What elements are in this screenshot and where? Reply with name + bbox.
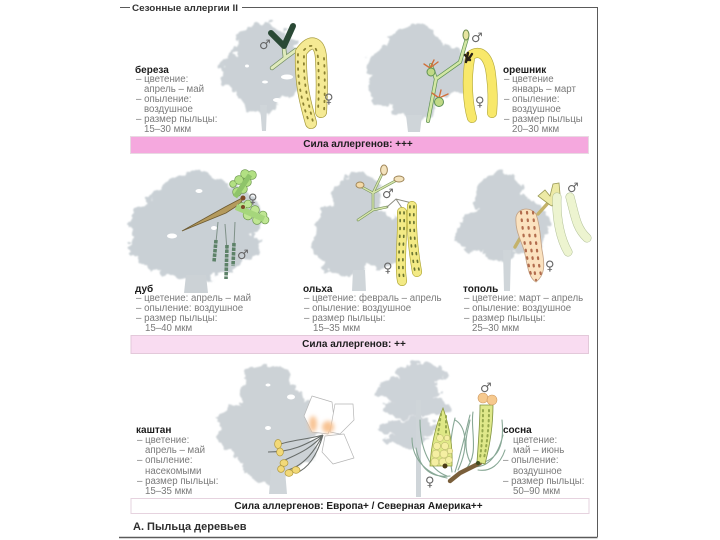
panel: alder — [303, 165, 442, 334]
hazel text — [503, 65, 583, 135]
pine branch, needles and cones — [412, 393, 505, 481]
birch text: – цветение: — [136, 74, 188, 85]
female symbol: ♀ — [475, 95, 485, 110]
poplar text: – опыление: воздушное — [464, 303, 571, 314]
strength bar: Europe / North America: Сила аллергенов: Европа+ / Северная Америка++ — [234, 501, 483, 512]
alder text: ольха — [303, 284, 333, 295]
alder tree silhouette — [313, 173, 406, 276]
female symbol: ♀ — [383, 261, 393, 276]
hazel text: – размер пыльцы — [504, 114, 583, 125]
female symbol: ♀ — [324, 92, 334, 107]
pine text: 50–90 мкм — [513, 486, 560, 497]
chestnut text: апрель – май — [145, 445, 205, 456]
poplar text — [463, 284, 583, 334]
panel: chestnut — [136, 365, 354, 497]
chestnut flower — [268, 396, 354, 476]
strength bar: +++: Сила аллергенов: +++ — [303, 139, 413, 150]
birch tree silhouette — [220, 22, 304, 113]
chestnut text: насекомыми — [145, 466, 201, 477]
alder text: – цветение: февраль – апрель — [304, 293, 442, 304]
oak text: дуб — [135, 283, 153, 295]
pine text: май – июнь — [513, 445, 564, 456]
pine text: воздушное — [513, 466, 562, 477]
strength bar: ++: Сила аллергенов: ++ — [302, 339, 406, 350]
alder text: – размер пыльцы: — [304, 313, 385, 324]
chestnut canopy gaps — [265, 384, 295, 430]
alder text: 15–35 мкм — [313, 323, 360, 334]
alder shoot and catkins — [356, 165, 419, 281]
strength bar: +++ — [130, 136, 588, 154]
oak text: – опыление: воздушное — [136, 303, 243, 314]
female symbol: ♀ — [545, 259, 555, 274]
strength bar: ++ — [131, 336, 588, 354]
panel: hazel — [367, 26, 583, 135]
birch text: – опыление: — [136, 94, 192, 105]
male symbol: ♂ — [259, 38, 271, 53]
birch text: воздушное — [144, 104, 193, 115]
pine text: – размер пыльцы: — [503, 476, 584, 487]
chestnut text: – опыление: — [137, 455, 193, 466]
male symbol: ♂ — [480, 381, 492, 396]
oak text: 15–40 мкм — [145, 323, 192, 334]
page frame — [119, 8, 598, 538]
pine text: сосна — [503, 425, 532, 436]
panel: oak — [130, 169, 269, 334]
hazel text: 20–30 мкм — [512, 124, 559, 135]
male symbol: ♂ — [382, 187, 394, 202]
hazel shoot and catkins — [424, 30, 493, 121]
panel: poplar — [457, 173, 587, 334]
panel: birch — [135, 22, 334, 135]
birch canopy gaps — [245, 64, 293, 102]
hazel text: январь – март — [512, 84, 576, 95]
chestnut text — [136, 425, 218, 497]
pine text: цветение: — [513, 435, 557, 446]
birch text: береза — [135, 64, 169, 76]
pine trunk — [416, 400, 421, 497]
oak text — [135, 283, 251, 334]
poplar text: тополь — [463, 284, 498, 295]
chestnut text: 15–35 мкм — [145, 486, 192, 497]
poplar text: – цветение: март – апрель — [464, 293, 583, 304]
chestnut text: каштан — [136, 425, 171, 436]
birch trunk — [260, 105, 267, 131]
oak text: – цветение: апрель – май — [136, 293, 251, 304]
panel: pine — [378, 363, 584, 497]
hazel text: – цветение — [504, 74, 554, 85]
pine tree silhouette — [378, 363, 452, 446]
poplar text: 25–30 мкм — [472, 323, 519, 334]
birch text: 15–30 мкм — [144, 124, 191, 135]
birch text: – размер пыльцы: — [136, 114, 217, 125]
female symbol: ♀ — [248, 192, 258, 207]
poplar tree silhouette — [457, 173, 548, 262]
poplar shoot and catkins — [515, 183, 587, 282]
title: Сезонные аллергии II — [132, 3, 238, 13]
alder trunk — [352, 270, 366, 291]
chestnut text: – цветение: — [137, 435, 189, 446]
strength bar: Europe / North America — [131, 498, 589, 514]
female symbol: ♀ — [425, 475, 435, 490]
pine text — [503, 425, 584, 497]
birch shoot and catkins — [271, 26, 325, 123]
male symbol: ♂ — [237, 248, 249, 263]
male symbol: ♂ — [567, 181, 579, 196]
hazel tree silhouette — [367, 26, 469, 121]
poplar text: – размер пыльцы: — [464, 313, 545, 324]
oak trunk — [184, 275, 208, 293]
alder text — [303, 284, 442, 334]
chestnut tree silhouette — [218, 365, 321, 483]
oak shoot, leaves and catkins — [182, 169, 269, 279]
poplar trunk — [503, 250, 511, 291]
birch text — [135, 64, 217, 135]
section caption: А. Пыльца деревьев — [133, 521, 247, 533]
oak canopy gaps — [167, 189, 217, 238]
chestnut text: – размер пыльцы: — [137, 476, 218, 487]
hazel text: воздушное — [512, 104, 561, 115]
hazel text: – опыление: — [504, 94, 560, 105]
oak text: – размер пыльцы: — [136, 313, 217, 324]
hazel trunk — [406, 115, 422, 132]
pine text: – опыление: — [503, 455, 559, 466]
birch text: апрель – май — [144, 84, 204, 95]
male symbol: ♂ — [471, 31, 483, 46]
hazel text: орешник — [503, 65, 547, 76]
chestnut trunk — [269, 470, 287, 494]
alder text: – опыление: воздушное — [304, 303, 411, 314]
oak tree silhouette — [130, 172, 260, 279]
